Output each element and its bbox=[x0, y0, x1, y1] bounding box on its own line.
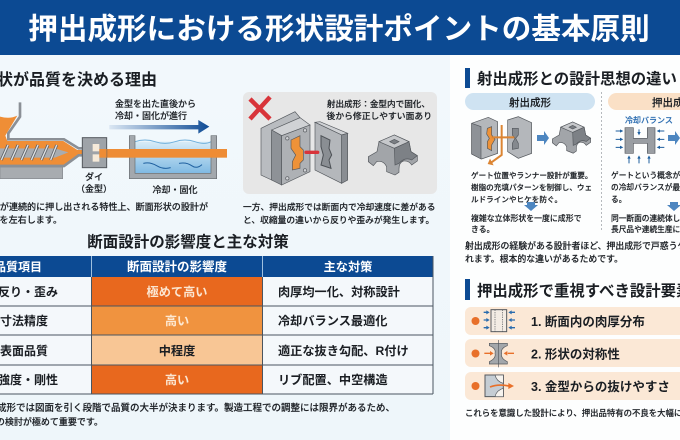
row: surface quality bbox=[0, 335, 433, 365]
icon: molded part bbox=[368, 135, 417, 175]
arrow: down bbox=[524, 202, 538, 211]
cooling tank bbox=[129, 136, 217, 179]
row: surface quality: 表面品質 bbox=[0, 343, 48, 358]
arrow: to product bbox=[668, 131, 680, 145]
process description bbox=[0, 201, 208, 225]
table: impact of section design bbox=[0, 256, 433, 394]
icon: mold with runner bbox=[472, 117, 532, 165]
text: injection points bbox=[471, 170, 592, 204]
table footnote bbox=[0, 402, 395, 427]
icon: bullet bbox=[472, 317, 480, 325]
panel description: と、収縮量の違いから反りや歪みが発生します。 bbox=[243, 214, 434, 225]
row: dimensional accuracy: 寸法精度 bbox=[0, 313, 48, 328]
icon: part bbox=[552, 122, 591, 153]
text: extrusion result bbox=[611, 213, 680, 234]
item 3: demolding: 3. 金型からの抜けやすさ bbox=[531, 379, 670, 394]
label: after exit: 冷却・固化が進行 bbox=[115, 110, 187, 121]
row: dimensional accuracy: 高い bbox=[165, 313, 189, 328]
row: dimensional accuracy bbox=[0, 306, 433, 335]
row: strength bbox=[0, 365, 433, 394]
left panel background bbox=[0, 55, 450, 440]
text: extrusion points bbox=[611, 170, 680, 204]
row: warp: 肉厚均一化、対称設計 bbox=[278, 284, 400, 299]
table header bbox=[0, 256, 433, 277]
injection note: 射出成形：金型内で固化、 bbox=[327, 98, 430, 109]
icon: bullet bbox=[472, 350, 480, 358]
icon: red connector bbox=[306, 147, 318, 157]
heading: table: 断面設計の影響度と主な対策 bbox=[87, 232, 289, 251]
item 1: wall thickness: 1. 断面内の肉厚分布 bbox=[531, 314, 645, 329]
pill: extrusion bbox=[608, 93, 680, 110]
die bbox=[82, 138, 107, 168]
table header: 主な対策 bbox=[324, 259, 372, 274]
panel description: 一方、押出成形では断面内で冷却速度に差がある bbox=[243, 201, 436, 212]
comparison note bbox=[465, 240, 680, 264]
item 2: symmetry bbox=[465, 339, 680, 367]
title banner: 押出成形における形状設計ポイントの基本原則 bbox=[28, 13, 650, 46]
title banner bbox=[0, 0, 680, 55]
pill: injection molding: 射出成形 bbox=[509, 96, 551, 109]
column: extrusion bbox=[608, 93, 680, 234]
comparison note: れます。根本的な違いがあるためです。 bbox=[465, 253, 623, 264]
screw bbox=[0, 145, 68, 160]
row: dimensional accuracy: 冷却バランス最適化 bbox=[278, 313, 387, 328]
icon: thickness bbox=[484, 310, 515, 332]
text: injection points: ゲート位置やランナー設計が重要。 bbox=[471, 170, 592, 180]
text: injection result: 複雑な立体形状を一度に成形で bbox=[471, 213, 582, 223]
molten resin bbox=[0, 116, 83, 165]
pill: injection molding bbox=[465, 93, 595, 110]
icon: bullet bbox=[472, 382, 480, 390]
icon: H section bbox=[616, 128, 664, 163]
row: warp bbox=[0, 277, 433, 306]
text: injection points: ルドラインやヒケを防ぐ。 bbox=[471, 194, 562, 204]
label: cooling balance: 冷却バランス bbox=[625, 115, 673, 125]
label: die: ダイ bbox=[85, 171, 103, 182]
row: strength: リブ配置、中空構造 bbox=[278, 372, 388, 387]
extruder bbox=[0, 102, 83, 179]
label: cooling: 冷却・固化 bbox=[152, 184, 198, 195]
item 2: symmetry: 2. 形状の対称性 bbox=[531, 346, 620, 362]
label: after exit bbox=[115, 98, 196, 121]
label: die: （金型） bbox=[76, 183, 112, 194]
icon: open mold left half bbox=[261, 112, 310, 185]
divider bbox=[600, 92, 602, 232]
text: injection result: きる。 bbox=[471, 225, 495, 234]
injection note: 後から修正しやすい面あり bbox=[327, 110, 432, 121]
extruded profile bbox=[103, 149, 227, 158]
icon: open mold right half bbox=[315, 122, 348, 183]
label: after exit: 金型を出た直後から bbox=[115, 98, 196, 109]
extrusion process diagram bbox=[0, 98, 227, 195]
panel description bbox=[243, 201, 436, 225]
icon: demolding bbox=[485, 375, 514, 397]
arrow: down bbox=[667, 202, 680, 211]
icon: symmetry bbox=[484, 340, 514, 367]
row: strength: 高い bbox=[165, 372, 189, 387]
row: surface quality: 適正な抜き勾配、R付け bbox=[278, 343, 409, 358]
item 1: wall thickness bbox=[465, 307, 680, 335]
table header: 断面設計の影響度 bbox=[127, 259, 227, 274]
text: injection points: 樹脂の充填パターンを制御し、ウェ bbox=[471, 182, 592, 192]
item 3: demolding bbox=[465, 372, 680, 400]
hopper and barrel walls bbox=[0, 102, 83, 166]
panel: injection molding comparison bbox=[243, 92, 437, 194]
label: die bbox=[76, 171, 112, 194]
heading: design philosophy difference: 射出成形との設計思想の違い bbox=[477, 69, 677, 88]
text: injection result bbox=[471, 213, 582, 234]
base block bbox=[0, 167, 63, 179]
text: extrusion points: る。 bbox=[611, 195, 626, 204]
row: surface quality: 中程度 bbox=[159, 343, 195, 358]
row: warp: 極めて高い bbox=[147, 284, 207, 299]
icon: red cross bbox=[250, 97, 270, 119]
gradient arrow bbox=[109, 120, 209, 134]
injection note bbox=[327, 98, 432, 121]
arrow: to part bbox=[537, 131, 549, 145]
column: injection molding bbox=[465, 93, 595, 234]
